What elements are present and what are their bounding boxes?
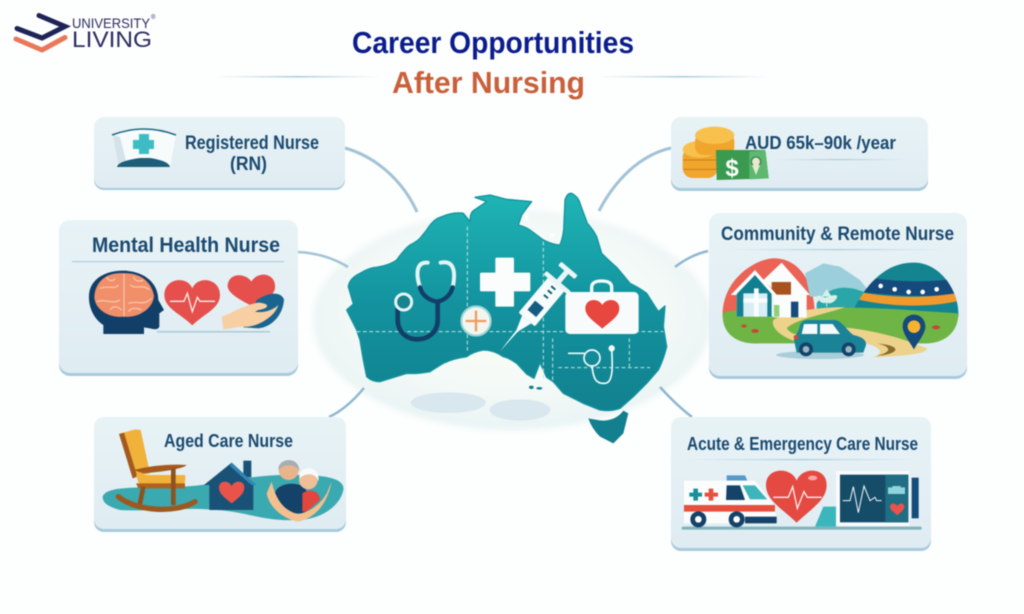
panel: community and remote nurse: Community & Remote Nurse — [721, 223, 954, 245]
logo: University Living — [16, 14, 156, 52]
illustration: countryside scene — [723, 258, 960, 357]
icon: elderly couple in hands — [267, 460, 332, 522]
logo: University Living: ® — [151, 14, 156, 21]
title: After Nursing — [392, 65, 585, 100]
panel: registered nurse — [94, 117, 345, 190]
connector: community nurse — [675, 251, 708, 267]
panel: salary — [671, 117, 928, 191]
panel: registered nurse: (RN) — [230, 154, 267, 175]
panel: community and remote nurse — [709, 213, 967, 379]
icon: white cross — [481, 259, 529, 305]
australia map with medical icons — [347, 193, 667, 443]
state borders — [357, 227, 663, 383]
icon: location pin — [903, 315, 925, 349]
map halo — [313, 210, 711, 430]
connector: salary — [599, 148, 671, 211]
monitor stand — [815, 507, 836, 527]
icon: nurse cap — [112, 128, 176, 167]
icon: hand holding heart — [222, 275, 284, 329]
panel: salary: AUD 65k–90k /year — [745, 132, 896, 153]
connector: acute nurse — [660, 387, 692, 417]
icon: syringe — [488, 258, 582, 362]
icon: rocking chair — [118, 429, 195, 509]
map shadow ovals — [411, 392, 550, 421]
logo: University Living: LIVING — [72, 27, 152, 52]
islands — [529, 386, 542, 390]
title: Career Opportunities — [352, 25, 634, 60]
icon: ambulance — [684, 475, 777, 527]
icon: car — [776, 320, 866, 359]
panel: aged care nurse: Aged Care Nurse — [164, 430, 293, 451]
connector: registered nurse — [345, 148, 417, 212]
icon: stethoscope — [396, 262, 454, 339]
icon: plus circle — [461, 306, 491, 336]
connector: aged care nurse — [329, 388, 364, 417]
icon: clinic — [731, 270, 778, 317]
title — [215, 25, 767, 100]
icon: heart monitor — [836, 471, 919, 526]
panel: mental health nurse — [59, 220, 298, 376]
icon: white house — [763, 263, 810, 317]
icon: brain in head — [89, 271, 164, 334]
icon: heart with pulse — [766, 471, 827, 523]
panel: registered nurse: Registered Nurse — [185, 133, 319, 154]
teal ground — [103, 475, 343, 520]
icon: heart with pulse — [164, 280, 220, 325]
mainland — [347, 193, 667, 411]
panel: mental health nurse: Mental Health Nurse — [92, 234, 280, 257]
icon: small stethoscope — [569, 346, 614, 383]
panel: acute and emergency care nurse: Acute & Emergency Care Nurse — [687, 433, 918, 454]
icon: first aid kit with heart — [565, 281, 639, 334]
gulf islands — [525, 213, 554, 237]
icon: house with heart — [204, 461, 256, 510]
panel: acute and emergency care nurse — [671, 417, 931, 551]
logo: University Living: UNIVERSITY — [72, 16, 150, 31]
icon: coins and banknote: $ — [725, 155, 739, 182]
connector: mental health nurse — [298, 252, 348, 267]
panel: aged care nurse — [94, 417, 346, 532]
tasmania — [588, 411, 628, 443]
